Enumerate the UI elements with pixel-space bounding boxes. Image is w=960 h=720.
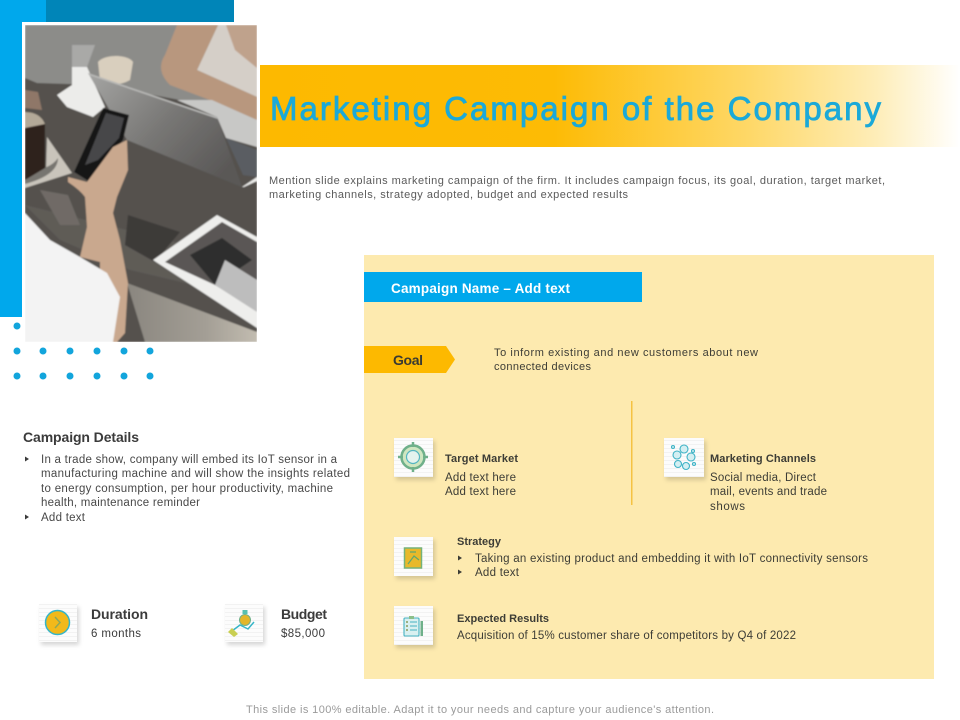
title band [260,65,960,147]
icon: budget hand with money bag [225,604,263,642]
campaign details: In a trade show, company will embed its IoT sensor in a [41,454,338,466]
icon: strategy [394,537,433,576]
marketing channels text: mail, events and trade [710,486,827,498]
panel: campaign [364,255,934,679]
campaign details: Campaign Details [23,429,139,445]
strategy text [457,536,868,579]
icon: target market [394,438,433,477]
target market text: Add text here [445,472,516,484]
budget text: Budget [281,606,327,622]
icon: duration clock [39,604,77,642]
campaign name bar [364,272,642,302]
goal text [494,347,758,373]
duration text: Duration [91,606,148,622]
duration text: 6 months [91,628,141,640]
expected results text: Acquisition of 15% customer share of competitors by Q4 of 2022 [457,630,796,642]
campaign details: Add text [41,512,86,524]
corner accent: blue blocks [0,0,234,317]
campaign details: manufacturing machine and will show the insights related [41,468,350,480]
duration text [91,606,148,640]
icon: marketing channels [664,438,704,477]
marketing channels text: Social media, Direct [710,472,817,484]
marketing channels text: Marketing Channels [710,453,816,465]
expected results text [457,613,796,642]
description text: Mention slide explains marketing campaign of the firm. It includes campaign focus, its goal, duration, target market, [269,175,885,187]
target market text: Target Market [445,453,518,465]
campaign details: health, maintenance reminder [41,497,200,509]
goal text: To inform existing and new customers about new [494,347,758,359]
icon: expected results [394,606,433,645]
description text: marketing channels, strategy adopted, budget and expected results [269,189,628,201]
footer note: This slide is 100% editable. Adapt it to your needs and capture your audience's attention. [246,704,714,716]
strategy text: Taking an existing product and embedding it with IoT connectivity sensors [475,553,868,565]
target market text: Add text here [445,486,516,498]
description text [269,175,885,201]
marketing channels text [710,453,827,513]
marketing channels text: shows [710,501,745,513]
campaign details [23,429,350,524]
campaign name bar: Campaign Name – Add text [391,281,570,296]
target market text [445,453,518,498]
dot grid decoration [14,322,154,380]
goal tag: Goal [393,352,423,368]
goal text: connected devices [494,361,592,373]
strategy text: Add text [475,567,520,579]
campaign details: to energy consumption, per hour productivity, machine [41,483,333,495]
title: Marketing Campaign of the Company [270,90,882,127]
strategy text: Strategy [457,536,502,548]
expected results text: Expected Results [457,613,549,625]
budget text [281,606,327,640]
photo: people working at a table with phone, laptop and tablet [22,22,257,342]
goal tag [364,346,455,373]
budget text: $85,000 [281,628,325,640]
